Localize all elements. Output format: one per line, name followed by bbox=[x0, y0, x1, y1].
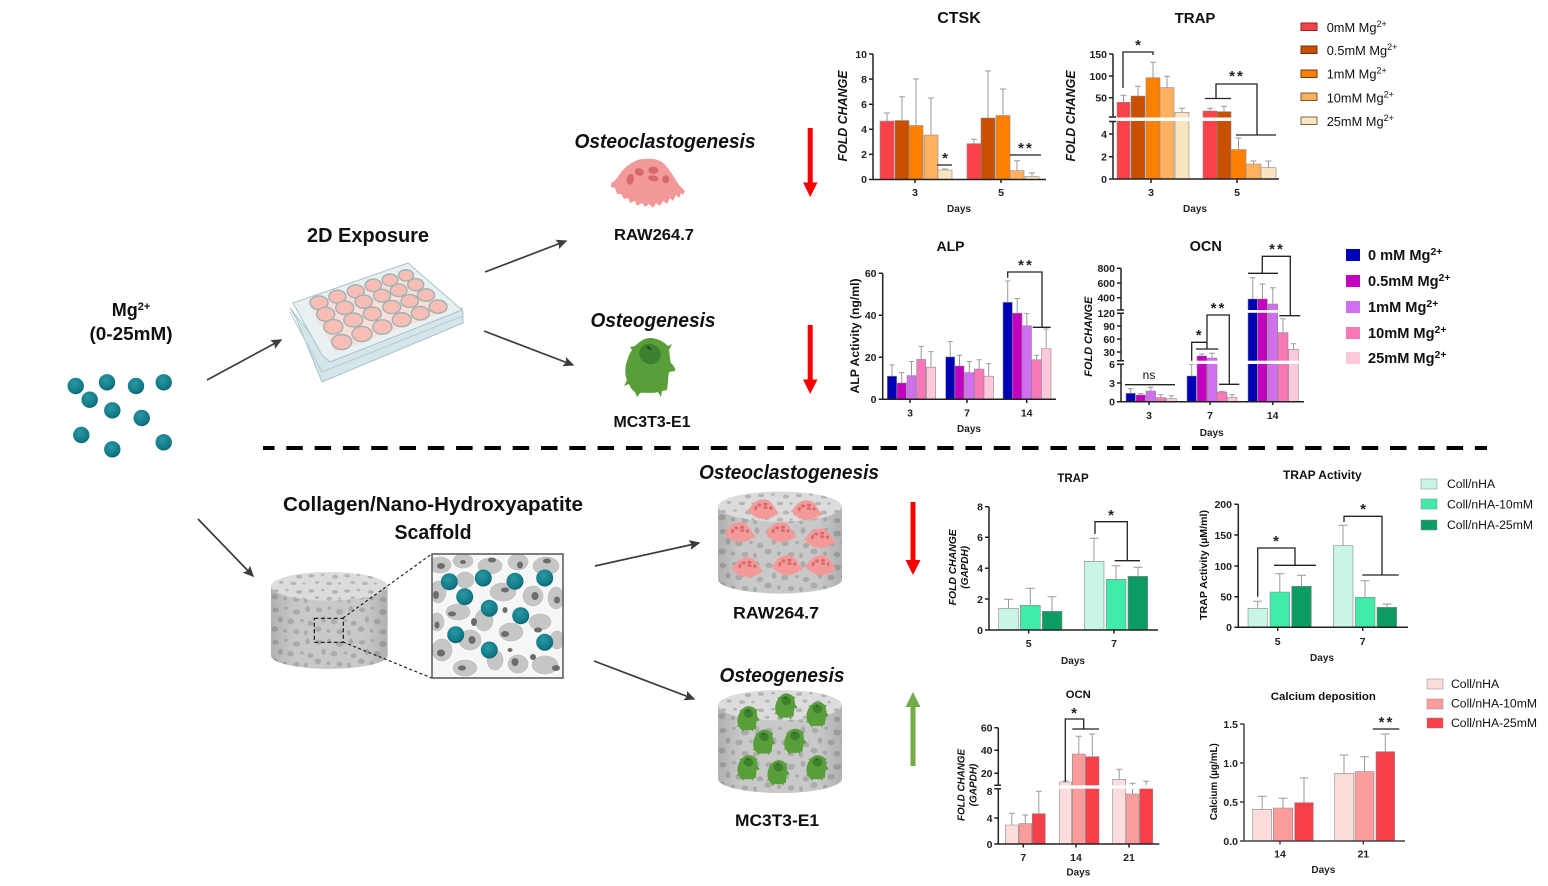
Mg2+ label: 2+ bbox=[138, 301, 150, 313]
axis labels: 10 bbox=[855, 49, 867, 61]
icon: well plate bbox=[290, 263, 463, 382]
axis labels: 20 bbox=[981, 768, 993, 780]
axis break bbox=[1107, 118, 1280, 121]
bars bbox=[1126, 299, 1298, 402]
chart title: TRAP bbox=[1175, 10, 1215, 27]
error bars bbox=[1128, 278, 1296, 399]
axis labels: 120 bbox=[1097, 308, 1115, 320]
axis labels bbox=[1083, 263, 1279, 439]
label: MC3T3-E1 (scaffold): MC3T3-E1 bbox=[735, 811, 819, 830]
axis labels: 40 bbox=[981, 745, 993, 757]
axis labels: 0 bbox=[1226, 622, 1232, 634]
chart: OCN (2D) bbox=[1083, 239, 1304, 439]
legend: green scaffold groups bbox=[1421, 477, 1533, 532]
legend: green scaffold groups: Coll/nHA-10mM bbox=[1447, 498, 1533, 512]
axis labels: 20 bbox=[865, 352, 877, 364]
axis labels: 150 bbox=[1089, 49, 1107, 61]
axis labels: 7 bbox=[1207, 410, 1213, 422]
chart: CTSK bbox=[836, 10, 1046, 215]
error bars bbox=[890, 281, 1049, 383]
legend: middle Mg concentrations: 2+ bbox=[1426, 298, 1438, 310]
label: Osteogenesis (2D): Osteogenesis bbox=[590, 310, 716, 332]
significance: * bbox=[1273, 533, 1279, 550]
axis labels: 14 bbox=[1070, 852, 1082, 864]
axis labels bbox=[1208, 719, 1369, 876]
heading: Collagen/Nano-Hydroxyapatite Scaffold: Collagen/Nano-Hydroxyapatite bbox=[283, 493, 583, 516]
label: RAW264.7 (scaffold): RAW264.7 bbox=[733, 604, 819, 622]
axis labels bbox=[956, 722, 1135, 878]
heading: Collagen/Nano-Hydroxyapatite Scaffold bbox=[283, 493, 583, 544]
axes bbox=[985, 507, 1158, 634]
error bars bbox=[1258, 734, 1390, 809]
axis labels: 3 bbox=[907, 408, 913, 420]
chart title: OCN bbox=[1190, 239, 1222, 255]
bars bbox=[1248, 546, 1397, 627]
axis labels: 200 bbox=[1214, 499, 1232, 511]
axis labels: 4 bbox=[1101, 129, 1107, 141]
axis labels: Days bbox=[1066, 868, 1091, 878]
axis labels: ALP Activity (ng/ml) bbox=[848, 278, 862, 394]
axis labels: 4 bbox=[977, 563, 983, 575]
significance: ** bbox=[1018, 257, 1034, 274]
icon: osteoclast bbox=[611, 159, 685, 208]
axis labels bbox=[1064, 49, 1240, 215]
axis labels: 0.5 bbox=[1223, 797, 1238, 809]
chart title: Calcium deposition bbox=[1271, 691, 1376, 703]
legend: middle Mg concentrations: 2+ bbox=[1439, 272, 1451, 284]
legend: top Mg concentrations: 10mM Mg bbox=[1327, 90, 1384, 106]
axis labels: 8 bbox=[977, 502, 983, 514]
axis labels: 5 bbox=[1234, 187, 1240, 199]
icon: Mg2+ particles bbox=[68, 374, 172, 457]
bars bbox=[999, 561, 1148, 630]
significance bbox=[1125, 241, 1300, 385]
chart title: TRAP Activity bbox=[1283, 468, 1362, 482]
axis labels bbox=[948, 502, 1117, 667]
axis labels: 0 bbox=[861, 174, 867, 186]
axis labels: FOLD CHANGE bbox=[956, 749, 968, 821]
axis labels: 50 bbox=[1220, 592, 1232, 604]
axis labels: 6 bbox=[977, 532, 983, 544]
axis labels: 14 bbox=[1267, 410, 1279, 422]
label: RAW264.7 (2D): RAW264.7 bbox=[614, 227, 694, 244]
axis labels: 30 bbox=[1103, 347, 1115, 359]
legend: top Mg concentrations bbox=[1301, 19, 1397, 129]
chart: TRAP (2D) bbox=[1064, 10, 1280, 215]
arrow: Mg to 2D exposure bbox=[207, 340, 281, 380]
axis labels: 6 bbox=[1109, 359, 1115, 371]
Mg2+ label bbox=[90, 300, 173, 344]
significance: ** bbox=[1211, 300, 1226, 317]
axis labels bbox=[848, 268, 1033, 435]
axis labels: 150 bbox=[1214, 530, 1232, 542]
chart: ALP bbox=[848, 238, 1056, 435]
icon: osteoblast bbox=[624, 338, 675, 397]
legend: top Mg concentrations: 0mM Mg bbox=[1327, 20, 1376, 35]
legend: middle Mg concentrations: 0 mM Mg bbox=[1368, 248, 1430, 264]
axis labels: 0 bbox=[977, 625, 983, 637]
axis break bbox=[992, 785, 1160, 789]
axis labels: 21 bbox=[1123, 852, 1135, 864]
significance: * bbox=[1135, 37, 1141, 54]
chart title: OCN bbox=[1066, 689, 1091, 701]
bars bbox=[1253, 752, 1395, 841]
chart: Calcium deposition bbox=[1208, 691, 1405, 876]
legend: middle Mg concentrations bbox=[1346, 246, 1451, 367]
axis labels: 40 bbox=[865, 310, 877, 322]
axis labels: 90 bbox=[1103, 321, 1115, 333]
axis labels: 0.0 bbox=[1223, 836, 1238, 848]
axis labels: 0 bbox=[1101, 174, 1107, 186]
axis labels: 0 bbox=[987, 839, 993, 851]
Mg2+ label: (0-25mM) bbox=[90, 324, 173, 344]
axis labels: 2 bbox=[1101, 152, 1107, 164]
significance bbox=[1123, 37, 1276, 135]
significance bbox=[1258, 501, 1399, 597]
legend: top Mg concentrations: 2+ bbox=[1384, 90, 1394, 100]
axis labels: 2 bbox=[977, 594, 983, 606]
axis labels: 100 bbox=[1089, 71, 1107, 83]
axis labels: 1.0 bbox=[1223, 758, 1238, 770]
label: MC3T3-E1 (2D): MC3T3-E1 bbox=[614, 414, 691, 431]
axis labels: Days bbox=[1310, 653, 1334, 664]
axis labels: Days bbox=[1311, 865, 1336, 876]
axis labels: FOLD CHANGE bbox=[948, 529, 959, 605]
axis labels: 8 bbox=[861, 74, 867, 86]
legend: red scaffold groups: Coll/nHA-10mM bbox=[1451, 696, 1537, 710]
icon: scaffold with osteoblasts bbox=[718, 690, 842, 793]
error bars bbox=[1120, 62, 1272, 168]
legend: red scaffold groups: Coll/nHA bbox=[1451, 677, 1500, 691]
axis labels: Days bbox=[957, 424, 981, 435]
axis labels: 7 bbox=[1360, 636, 1366, 648]
label: Osteoclastogenesis (2D): Osteoclastogenesis bbox=[574, 131, 756, 153]
axis labels bbox=[1198, 499, 1366, 664]
significance: ** bbox=[1229, 68, 1245, 85]
axis labels: 60 bbox=[865, 268, 877, 280]
axes bbox=[869, 54, 1046, 183]
axis labels: 1.5 bbox=[1223, 719, 1238, 731]
legend: middle Mg concentrations: 1mM Mg bbox=[1368, 300, 1426, 316]
chart title: CTSK bbox=[937, 10, 981, 27]
bars bbox=[1117, 78, 1276, 179]
significance bbox=[1065, 705, 1099, 782]
arrow: down red scaffold bbox=[906, 502, 920, 575]
axis labels: 4 bbox=[987, 813, 993, 825]
arrow: down red CTSK bbox=[803, 128, 818, 197]
legend: green scaffold groups: Coll/nHA bbox=[1447, 477, 1496, 491]
axes bbox=[994, 728, 1159, 848]
icon: porous scaffold bbox=[271, 554, 432, 678]
arrow: up green scaffold bbox=[906, 692, 920, 766]
chart title: ALP bbox=[936, 238, 964, 254]
heading: Collagen/Nano-Hydroxyapatite Scaffold: Scaffold bbox=[394, 521, 472, 544]
axis labels: 5 bbox=[998, 187, 1004, 199]
axis labels: Days bbox=[1200, 428, 1224, 439]
axis labels: 400 bbox=[1097, 292, 1115, 304]
Mg2+ label: Mg bbox=[112, 300, 138, 320]
legend: middle Mg concentrations: 2+ bbox=[1430, 246, 1442, 258]
legend: top Mg concentrations: 2+ bbox=[1384, 113, 1394, 123]
legend: top Mg concentrations: 2+ bbox=[1376, 66, 1387, 76]
axis labels: 21 bbox=[1357, 848, 1369, 860]
arrow: Mg to scaffold bbox=[198, 519, 253, 576]
axis labels: 0 bbox=[1109, 396, 1115, 408]
axis labels: 60 bbox=[1103, 334, 1115, 346]
bars bbox=[1005, 754, 1153, 844]
error bars bbox=[884, 71, 1035, 176]
arrow: scaffold to osteogenesis bbox=[594, 661, 694, 699]
axis labels: 3 bbox=[1109, 378, 1115, 390]
axis labels: 100 bbox=[1214, 561, 1232, 573]
arrow: down red ALP bbox=[803, 325, 818, 394]
axis labels: Calcium (µg/mL) bbox=[1208, 743, 1220, 820]
significance: * bbox=[1196, 327, 1202, 344]
axis labels: 14 bbox=[1021, 408, 1033, 420]
legend: middle Mg concentrations: 2+ bbox=[1434, 349, 1446, 361]
axis labels: 8 bbox=[987, 786, 993, 798]
label: Osteoclastogenesis (scaffold): Osteoclastogenesis bbox=[699, 462, 879, 484]
axis labels: 600 bbox=[1097, 278, 1115, 290]
axis labels: 50 bbox=[1095, 92, 1107, 104]
axis labels: 5 bbox=[1026, 638, 1032, 650]
legend: middle Mg concentrations: 10mM Mg bbox=[1368, 326, 1434, 342]
axis labels: TRAP Activity (µM/ml) bbox=[1198, 510, 1210, 620]
axis labels: 7 bbox=[964, 408, 970, 420]
axis breaks bbox=[1116, 310, 1304, 364]
error bars bbox=[1009, 734, 1149, 825]
axis labels bbox=[836, 49, 1004, 215]
axis labels: 3 bbox=[1146, 410, 1152, 422]
significance: * bbox=[1108, 507, 1114, 524]
chart: TRAP (scaffold) bbox=[948, 473, 1158, 667]
significance: * bbox=[1360, 501, 1366, 518]
legend: top Mg concentrations: 2+ bbox=[1376, 19, 1387, 29]
axis labels: FOLD CHANGE bbox=[1083, 296, 1095, 377]
legend: red scaffold groups: Coll/nHA-25mM bbox=[1451, 716, 1537, 730]
chart: TRAP Activity bbox=[1198, 468, 1408, 664]
axis labels: 5 bbox=[1275, 636, 1281, 648]
significance: ** bbox=[1269, 241, 1285, 258]
significance bbox=[937, 140, 1041, 167]
error bars bbox=[1004, 538, 1142, 611]
legend: top Mg concentrations: 0.5mM Mg bbox=[1327, 43, 1387, 58]
chart: OCN (scaffold) bbox=[956, 689, 1160, 878]
legend: top Mg concentrations: 1mM Mg bbox=[1327, 66, 1376, 82]
bars bbox=[887, 302, 1051, 399]
bars bbox=[880, 116, 1039, 180]
axis labels: 4 bbox=[861, 124, 867, 136]
axis labels: Days bbox=[1183, 204, 1207, 215]
error bars bbox=[1253, 525, 1392, 608]
significance: ns bbox=[1143, 368, 1155, 382]
axis labels: 7 bbox=[1020, 852, 1026, 864]
axis labels: 60 bbox=[981, 722, 993, 734]
axis labels: 3 bbox=[1148, 187, 1154, 199]
axis labels: 800 bbox=[1097, 263, 1115, 275]
axis labels: FOLD CHANGE bbox=[836, 70, 850, 162]
significance: ** bbox=[1379, 714, 1394, 731]
significance: * bbox=[1071, 705, 1077, 722]
legend: top Mg concentrations: 2+ bbox=[1387, 42, 1397, 52]
arrow: 2D to osteogenesis bbox=[484, 331, 573, 365]
axis labels: FOLD CHANGE bbox=[1064, 70, 1078, 162]
axis labels: 2 bbox=[861, 149, 867, 161]
arrow: 2D to osteoclastogenesis bbox=[485, 241, 566, 272]
axis labels: (GAPDH) bbox=[968, 763, 980, 806]
axis labels: Days bbox=[1061, 656, 1085, 667]
legend: red scaffold groups bbox=[1427, 677, 1537, 730]
icon: magnified scaffold with Mg particles bbox=[428, 553, 565, 678]
axes bbox=[1234, 504, 1408, 631]
significance: ** bbox=[1018, 140, 1034, 157]
axes bbox=[1109, 54, 1279, 183]
arrow: scaffold to osteoclastogenesis bbox=[595, 543, 699, 566]
axis labels: 14 bbox=[1274, 848, 1286, 860]
axes bbox=[1117, 268, 1304, 405]
axis labels: 3 bbox=[912, 187, 918, 199]
icon: scaffold with osteoclasts bbox=[718, 492, 842, 594]
significance: * bbox=[942, 150, 948, 167]
label: Osteogenesis (scaffold): Osteogenesis bbox=[720, 665, 844, 687]
legend: middle Mg concentrations: 0.5mM Mg bbox=[1368, 274, 1439, 290]
legend: middle Mg concentrations: 2+ bbox=[1434, 324, 1446, 336]
axis labels: 7 bbox=[1111, 638, 1117, 650]
heading: 2D Exposure: 2D Exposure bbox=[307, 225, 429, 247]
significance bbox=[1373, 714, 1399, 731]
axis labels: 6 bbox=[861, 99, 867, 111]
chart title: TRAP bbox=[1057, 473, 1089, 485]
legend: top Mg concentrations: 25mM Mg bbox=[1327, 114, 1384, 129]
axes bbox=[1240, 724, 1405, 844]
axis labels: 0 bbox=[871, 394, 877, 406]
axis labels: Days bbox=[947, 204, 971, 215]
significance bbox=[1008, 257, 1051, 327]
significance bbox=[1095, 507, 1140, 561]
legend: green scaffold groups: Coll/nHA-25mM bbox=[1447, 518, 1533, 532]
axes bbox=[879, 273, 1056, 403]
legend: middle Mg concentrations: 25mM Mg bbox=[1368, 351, 1434, 367]
axis labels: (GAPDH) bbox=[960, 545, 971, 589]
